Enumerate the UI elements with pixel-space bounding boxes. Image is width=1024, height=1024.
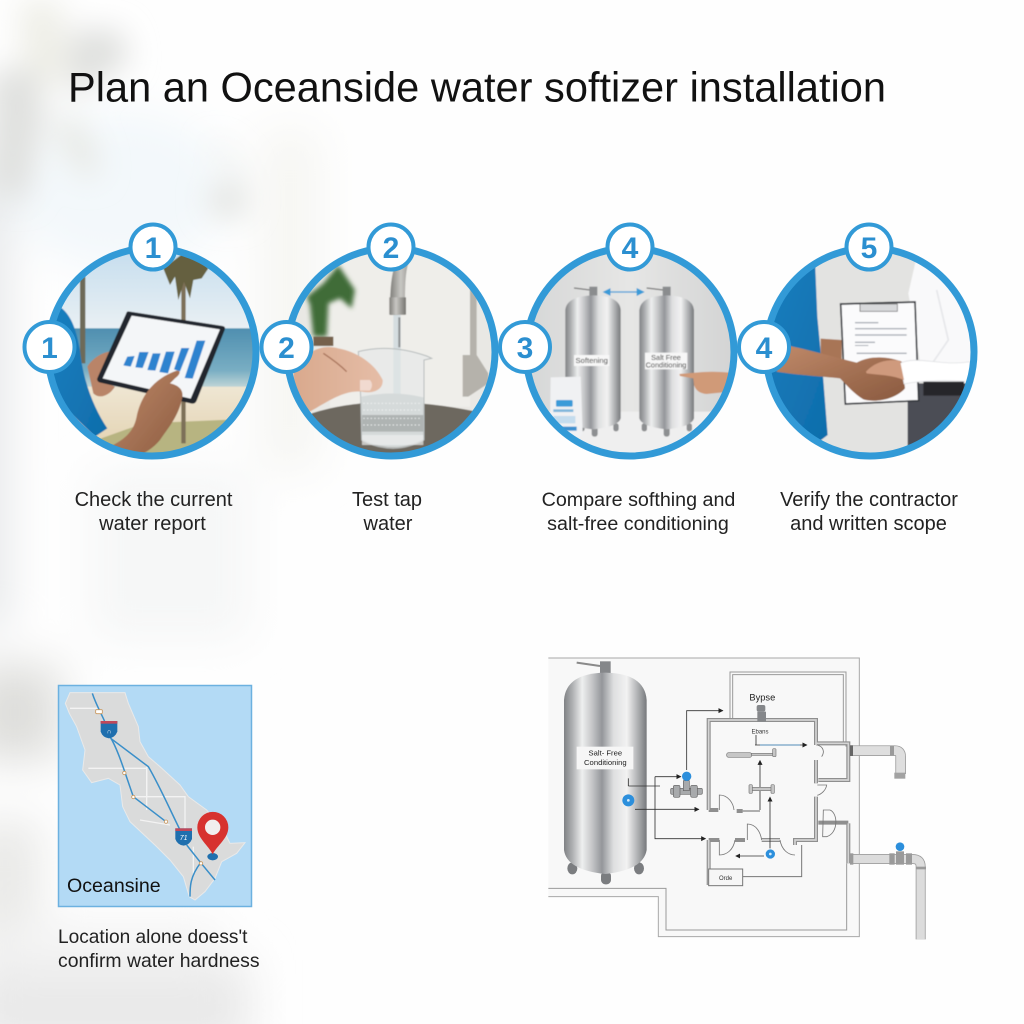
ring: [766, 248, 974, 456]
highway shield south: 71: [180, 835, 188, 842]
small room: Orde: [719, 876, 733, 882]
map caption: confirm water hardness: [58, 950, 260, 972]
badge left 4: [739, 322, 789, 372]
map land and routes: [65, 693, 245, 900]
title: Plan an Oceanside water softizer installation: [68, 64, 886, 110]
salt bag: [550, 377, 583, 437]
badge top 5: [846, 224, 892, 270]
photo: tablet at the beach: [54, 254, 252, 452]
tank label: Salt- Free: [589, 748, 622, 757]
inline sensors: [682, 772, 904, 859]
flow arrows and lines: [628, 711, 807, 856]
highway shield north: [101, 721, 117, 738]
caption 2: Test tap: [352, 489, 422, 511]
step 2 panel: test tap water: [262, 224, 500, 535]
badge left 1: [24, 322, 74, 372]
tank sensor: [622, 794, 634, 806]
plumbing diagram panel: [548, 658, 926, 939]
photo: faucet and beaker: [293, 254, 492, 452]
arrow between tanks: [604, 290, 643, 294]
diagram sheet: [548, 658, 859, 937]
ring: [287, 248, 495, 456]
tank label: [577, 747, 633, 769]
step 3 panel: compare softening and salt-free: [500, 224, 740, 535]
badge top 1: [130, 224, 176, 270]
caption 3: salt-free conditioning: [547, 513, 729, 535]
badge left 2: 2: [278, 332, 295, 365]
caption 1: water report: [98, 513, 206, 535]
inline valve: [671, 781, 702, 797]
label: salt-free conditioning: [645, 353, 687, 369]
badge left 3: [500, 322, 550, 372]
map panel: Oceanside location: [58, 686, 260, 972]
location pin: [197, 812, 228, 860]
badge top 2: [368, 224, 414, 270]
badge top 1: 1: [145, 232, 161, 265]
label: softening: Softening: [575, 356, 608, 365]
floor plan walls: [709, 720, 848, 885]
label: salt-free conditioning: Conditioning: [646, 360, 686, 369]
caption 4: and written scope: [790, 513, 947, 535]
ring: [48, 248, 256, 456]
map label: Oceansine: [67, 875, 161, 897]
outer building outline: [548, 672, 847, 930]
drain label: Ebans: [752, 729, 768, 735]
badge left 4: 4: [756, 332, 773, 365]
tank label: Conditioning: [584, 758, 627, 767]
door swings: [719, 745, 836, 855]
caption 2: water: [363, 513, 413, 535]
caption 4: Verify the contractor: [780, 489, 958, 511]
caption 1: Check the current: [75, 489, 233, 511]
photo: two steel tanks: [532, 254, 730, 452]
badge top 4: 4: [622, 232, 639, 265]
small room: [709, 845, 802, 886]
map caption: Location alone doess't: [58, 927, 248, 948]
lower supply pipe: [850, 859, 921, 939]
badge top 5: 5: [861, 232, 877, 265]
salt-free tank: [564, 661, 647, 884]
highway shield south: [175, 828, 192, 846]
interior pipe fittings: [727, 749, 776, 793]
step 4 panel: verify contractor: [739, 224, 980, 535]
caption 3: Compare softhing and: [542, 489, 735, 511]
map frame: [58, 686, 252, 906]
badge left 3: 3: [517, 332, 533, 365]
badge left 2: [262, 322, 312, 372]
bypass valve: [757, 705, 766, 722]
ring: [526, 248, 734, 456]
photo: handshake and clipboard: [772, 254, 970, 452]
badge top 2: 2: [383, 232, 399, 265]
step 1 panel: check water report: [24, 224, 267, 535]
pointing hand: [679, 372, 730, 394]
badge left 1: 1: [41, 332, 58, 365]
highway shield north: ∩: [107, 728, 111, 735]
map caption: [58, 927, 260, 972]
bypass label: Bypse: [749, 692, 775, 702]
badge top 4: [608, 224, 652, 270]
upper drain pipe: [850, 751, 901, 774]
label: salt-free conditioning: Salt Free: [651, 353, 681, 362]
